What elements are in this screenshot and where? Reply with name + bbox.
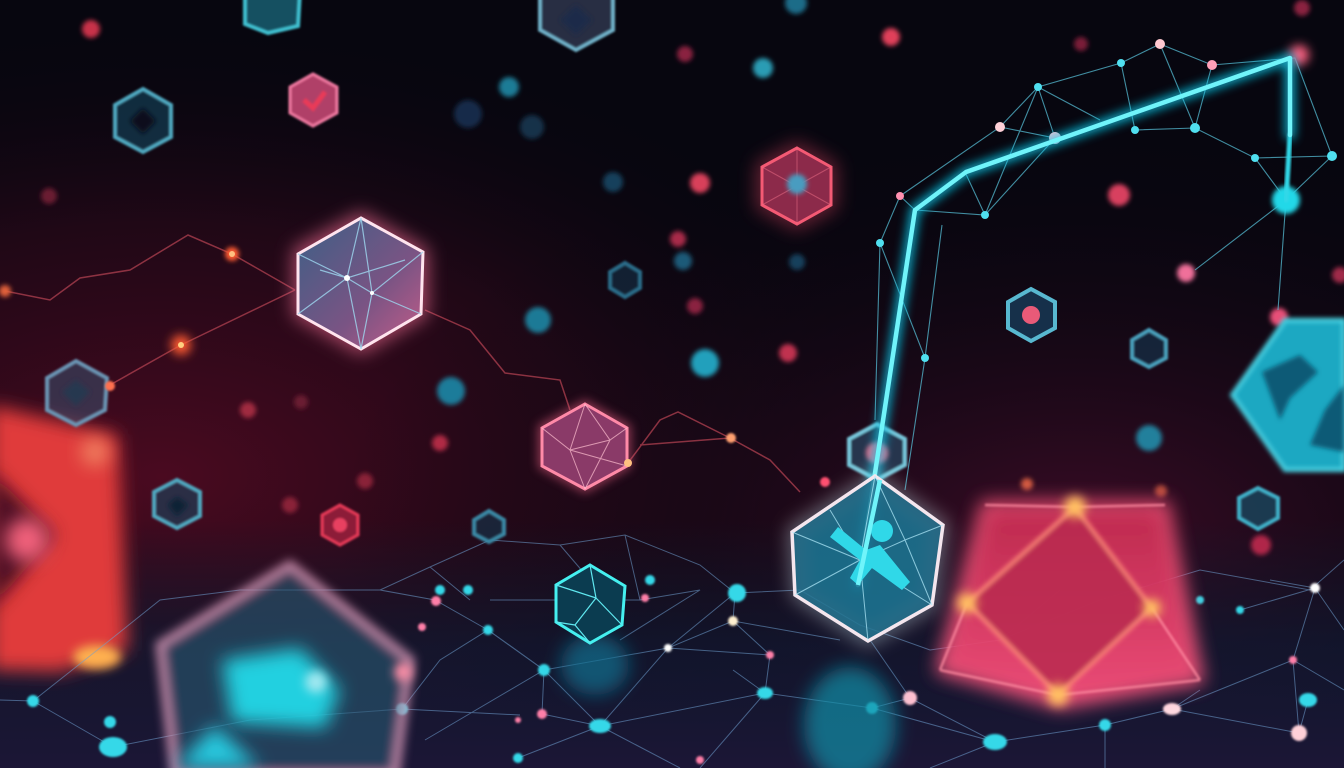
cyan map hexagon right xyxy=(1232,320,1344,470)
icon: hexagon top centre xyxy=(540,0,613,50)
small background hexagons xyxy=(47,0,1278,545)
large pink polygon right xyxy=(940,496,1200,706)
pink hexagon centre xyxy=(541,403,632,490)
glowing red nodes left xyxy=(0,247,830,487)
icon: ringed hexagon right xyxy=(1008,289,1055,341)
icon: hexagon top xyxy=(245,0,300,33)
icon: hexagon right lower xyxy=(1239,488,1278,529)
icon: pink hexagon upper left xyxy=(290,74,337,126)
icon: hexagon centre xyxy=(610,263,640,297)
icon: hexagon left xyxy=(47,361,107,425)
cyan wireframe cube xyxy=(556,565,625,643)
blurred red block left xyxy=(0,405,128,672)
main glass hexagon xyxy=(298,217,423,349)
cyan wire mesh upper right xyxy=(875,44,1332,490)
red faint polyline left xyxy=(5,235,800,492)
network nodes xyxy=(27,575,1320,764)
icon: hexagon lower left xyxy=(154,480,200,528)
floating bokeh dots xyxy=(41,0,1344,555)
icon: figure xyxy=(830,520,910,590)
network mesh floor xyxy=(0,535,1344,768)
soft cyan reflections on floor xyxy=(561,635,896,768)
hexagon dark cores xyxy=(62,5,592,516)
blurred glass hexagon bottom left xyxy=(160,565,412,768)
icon: hexagon behind line xyxy=(849,424,905,480)
glowing cyan line xyxy=(858,58,1290,585)
icon: hexagon upper left xyxy=(115,89,171,152)
icon: hexagon right xyxy=(1132,330,1166,367)
icon: red hexagon lower left xyxy=(322,505,358,545)
icon: hexagon bottom centre xyxy=(474,511,504,542)
red hexagon upper centre xyxy=(760,146,833,226)
cyan mesh nodes xyxy=(876,39,1337,362)
glass hexagon with figure icon xyxy=(792,476,944,642)
